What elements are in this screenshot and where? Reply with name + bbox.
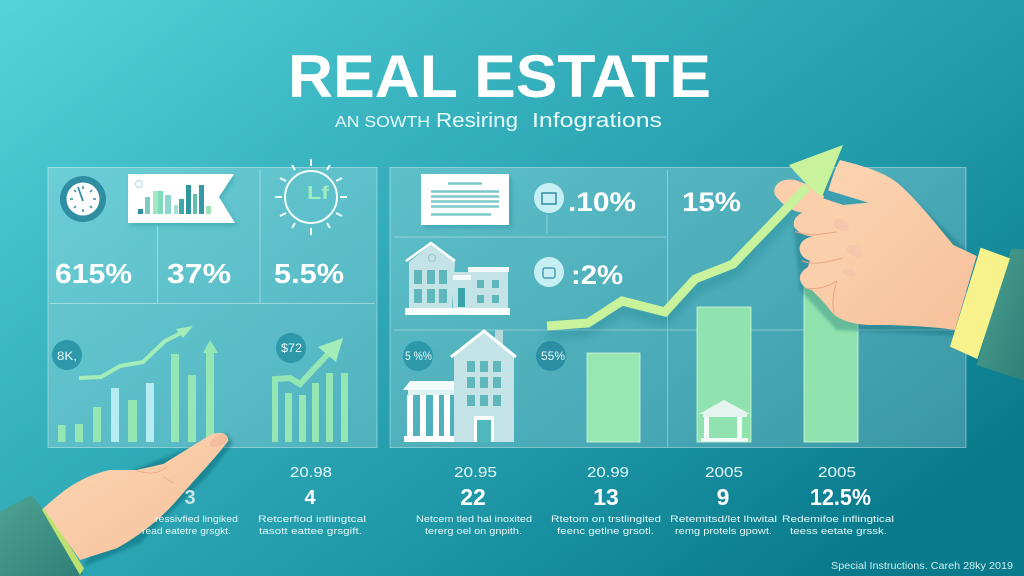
column: 2005 / 9: 2005	[705, 464, 743, 481]
cuff	[42, 508, 84, 575]
icon: house building	[405, 243, 510, 315]
subtitle: AN SOWTH	[335, 114, 430, 131]
stat: .10% with icon	[534, 183, 636, 217]
hand shadow	[793, 163, 967, 337]
hand	[43, 433, 228, 560]
nail	[208, 432, 230, 450]
badge: $72	[276, 333, 306, 363]
finger creases	[795, 232, 843, 313]
column: 2005 / 12.5%	[782, 464, 894, 537]
column: 2005 / 12.5%: Redemifoe inflingtical	[782, 514, 894, 525]
arrow: rising growth trend	[547, 145, 843, 326]
gap between thumb and finger	[823, 190, 868, 205]
finger crease	[137, 467, 173, 483]
stat: 37%: 37%	[167, 258, 231, 289]
badge: 8K	[52, 340, 82, 370]
column: 2005 / 12.5%: 2005	[818, 464, 856, 481]
chart: right growth bars	[275, 338, 348, 442]
column: 20.99 / 13: Rtetom on trstlingited	[551, 514, 661, 525]
column: 2005 / 12.5%: teess eetate grssk.	[790, 526, 887, 537]
subtitle	[335, 110, 662, 132]
column: 2005 / 9	[670, 464, 777, 537]
column: 20.98 / 4: 4	[304, 487, 316, 509]
icon: sun gauge	[275, 159, 347, 235]
stat: .10% with icon: .10%	[568, 187, 636, 217]
column: 20.95 / 22: Netcem tled hal inoxited	[416, 514, 532, 525]
column: 2005 / 9: remg protels gpowt.	[675, 526, 772, 537]
column: 3 (partly behind hand): read eatetre grsgkt.	[142, 526, 231, 537]
subtitle: Resiring	[436, 110, 518, 132]
column: 2005 / 9: 9	[717, 484, 729, 510]
column: 20.99 / 13: 20.99	[587, 464, 629, 481]
bar: third	[804, 280, 858, 442]
column: 3 (partly behind hand): 3	[184, 487, 196, 509]
sleeve	[977, 248, 1024, 381]
column: 20.98 / 4: tasott eattee grsgift.	[259, 526, 362, 537]
column: 2005 / 12.5%: 12.5%	[810, 484, 871, 510]
badge: 5%	[403, 341, 433, 371]
fingers	[774, 180, 863, 290]
stat: 5.5%: 5.5%	[274, 258, 344, 289]
footer note: Special Instructions. Careh 28ky 2019	[831, 561, 1013, 572]
column: 20.95 / 22: 22	[460, 484, 486, 510]
trend line shadow	[547, 205, 800, 334]
cuff	[950, 248, 1010, 359]
stat: :2% with icon	[534, 257, 623, 290]
stat: 15%: 15%	[682, 187, 741, 217]
badge: 5%: 5 %%	[405, 351, 432, 363]
right hand with cuff	[774, 160, 1024, 381]
icon: apartment and columned hall	[403, 330, 516, 442]
bar: second with bank icon	[697, 307, 751, 442]
sleeve	[0, 495, 83, 576]
column: 20.99 / 13: 13	[593, 484, 619, 510]
stat: :2% with icon: :2%	[571, 260, 623, 290]
column: 2005 / 9: Retemitsd/let lhwital	[670, 514, 777, 525]
badge: 55%: 55%	[541, 351, 565, 363]
chart: left growth bars	[58, 326, 218, 442]
hand palm	[803, 160, 977, 330]
column: 3 (partly behind hand): ressivfied lingiked	[155, 514, 238, 525]
subtitle: Infogrations	[532, 110, 662, 132]
column: 3 (partly behind hand)	[142, 487, 238, 537]
column: 20.95 / 22: tererg oel on gnpith.	[425, 526, 522, 537]
left hand with cuff	[0, 432, 233, 576]
column: 20.98 / 4: Retcerfiod intlingtcal	[258, 514, 366, 525]
panel: left statistics	[48, 159, 377, 448]
column: 20.99 / 13: feenc getlne grsotl.	[557, 526, 654, 537]
column: 20.95 / 22	[416, 464, 532, 537]
icon: document	[421, 174, 512, 228]
stat: 615%: 615%	[55, 258, 132, 289]
column: 20.98 / 4: 20.98	[290, 464, 332, 481]
bar: first	[587, 353, 640, 442]
badge: 8K: 8K,	[57, 351, 77, 363]
icon: clock	[60, 176, 106, 222]
badge: $72: $72	[281, 343, 302, 355]
column: 20.99 / 13	[551, 464, 661, 537]
hand shadow	[83, 433, 233, 567]
column: 20.95 / 22: 20.95	[454, 464, 497, 481]
badge: 55%	[536, 341, 566, 371]
panel: right statistics	[390, 168, 966, 448]
finger nails	[831, 216, 865, 277]
icon: ribbon bar chart	[128, 174, 237, 226]
title: REAL ESTATE	[288, 43, 711, 110]
icon: sun gauge: Lf	[307, 183, 330, 203]
column: 20.98 / 4	[258, 464, 366, 537]
